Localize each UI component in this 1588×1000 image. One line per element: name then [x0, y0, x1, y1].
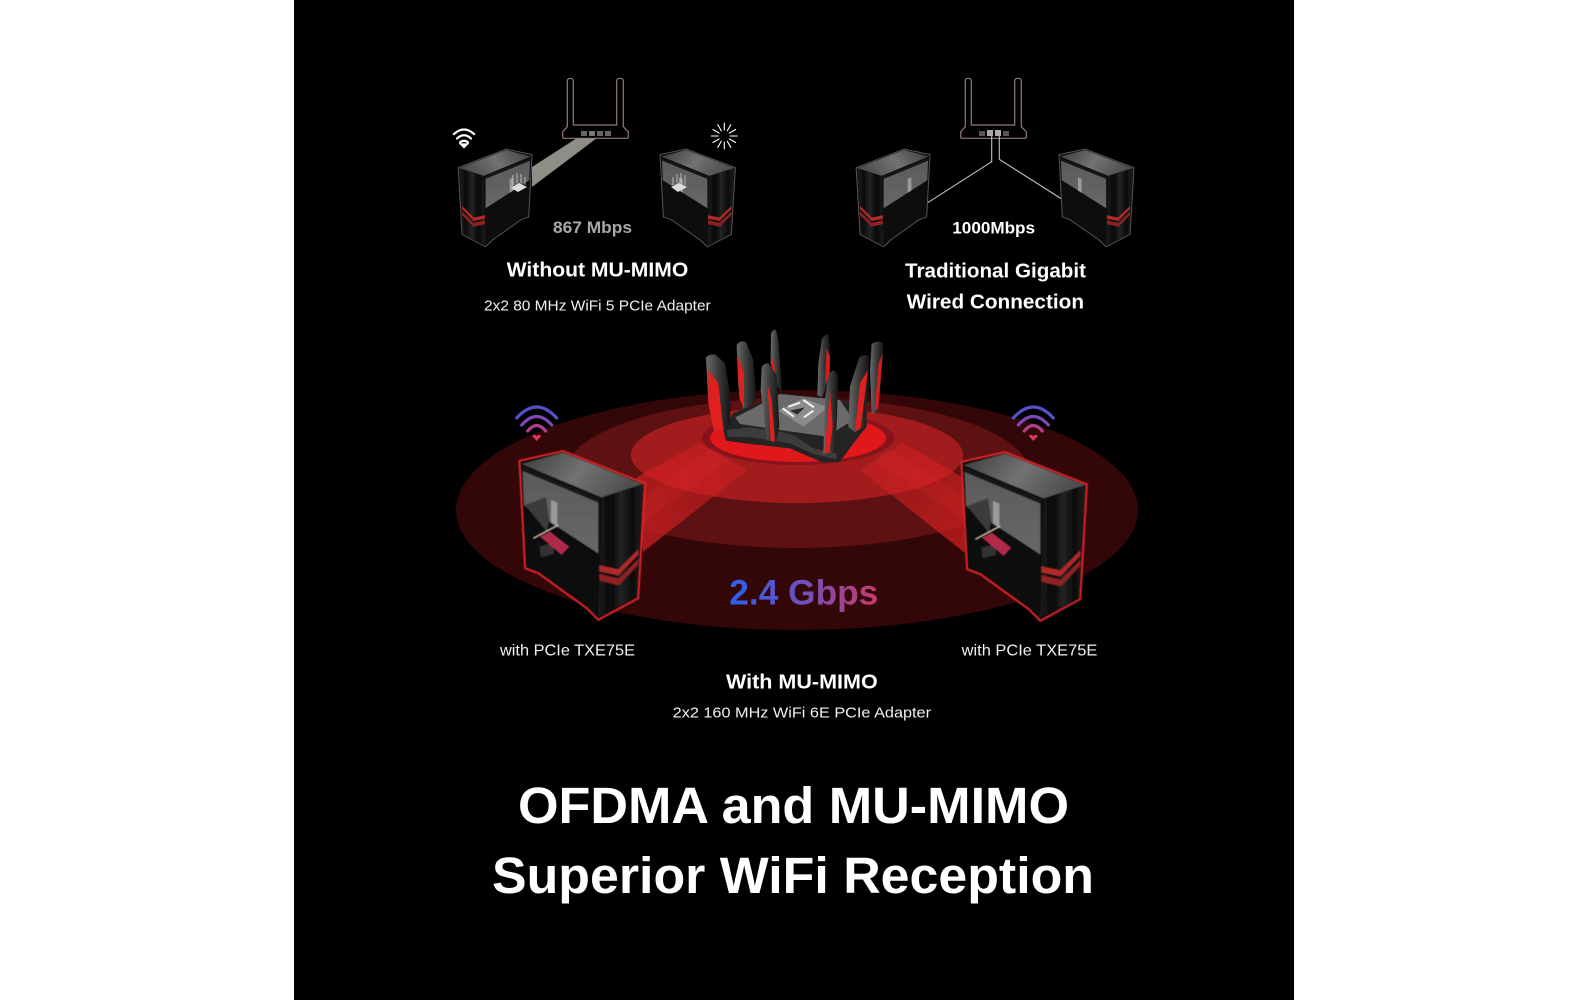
signal rings: [456, 390, 1138, 630]
diagram: traditional gigabit wired: [856, 78, 1134, 313]
icon: outline router left: [563, 78, 628, 138]
title: Superior WiFi Reception: [492, 847, 1094, 904]
back antennas: [737, 330, 883, 414]
heading: Without MU-MIMO: Without MU-MIMO: [507, 259, 688, 282]
beam: shared wireless link: [532, 138, 597, 187]
beam: router to left PC: [637, 443, 747, 552]
beam: router to right PC: [860, 443, 965, 553]
PC case: left, connected: [458, 149, 532, 247]
speed label: 2.4 Gbps: 2.4 Gbps: [729, 572, 878, 612]
icon: colored wifi left: [517, 407, 557, 441]
panel: black background: [294, 0, 1294, 1000]
icon: small white router in right PC: [671, 173, 687, 192]
router center diamond: [778, 398, 828, 427]
caption: left PC: with PCIe TXE75E: [499, 643, 635, 660]
icon: colored wifi right: [1013, 407, 1053, 441]
PC case: wired left: [856, 149, 930, 247]
icon: small white router in left PC: [511, 173, 527, 192]
title: [492, 777, 1094, 904]
PC case: right, buffering: [660, 149, 735, 247]
router body: [723, 393, 867, 463]
icon: outline router right: [961, 78, 1026, 138]
icon: loading spinner: [711, 123, 737, 149]
icon: white wifi: [454, 130, 474, 147]
PC case: wired right: [1059, 149, 1134, 247]
router: gaming router with eight antennas: [706, 330, 883, 463]
speed label: 867 Mbps: 867 Mbps: [553, 218, 632, 237]
front antennas: [706, 354, 869, 454]
caption: right PC: with PCIe TXE75E: [961, 643, 1097, 660]
heading: Traditional Gigabit Wired Connection: Wired Connection: [907, 290, 1084, 313]
router body highlight: [727, 427, 837, 459]
speed label: 1000Mbps: 1000Mbps: [952, 218, 1035, 237]
subtext: WiFi 5 adapter: 2x2 80 MHz WiFi 5 PCIe Adapter: [484, 299, 711, 315]
router logo: [783, 400, 814, 417]
diagram: without MU-MIMO: [454, 78, 737, 315]
heading: Traditional Gigabit Wired Connection: Traditional Gigabit: [905, 259, 1086, 282]
heading: Traditional Gigabit Wired Connection: [905, 259, 1086, 313]
PC case: left with TXE75E: [519, 451, 645, 620]
diagram: with MU-MIMO: [456, 330, 1138, 722]
title: OFDMA and MU-MIMO: [518, 777, 1069, 834]
wires: two ethernet cables: [927, 136, 1063, 203]
router top plate: [735, 394, 853, 437]
heading: With MU-MIMO: With MU-MIMO: [726, 670, 878, 693]
PC case: right with TXE75E: [961, 452, 1087, 621]
subtext: WiFi 6E adapter: 2x2 160 MHz WiFi 6E PCIe Adapter: [673, 705, 931, 722]
